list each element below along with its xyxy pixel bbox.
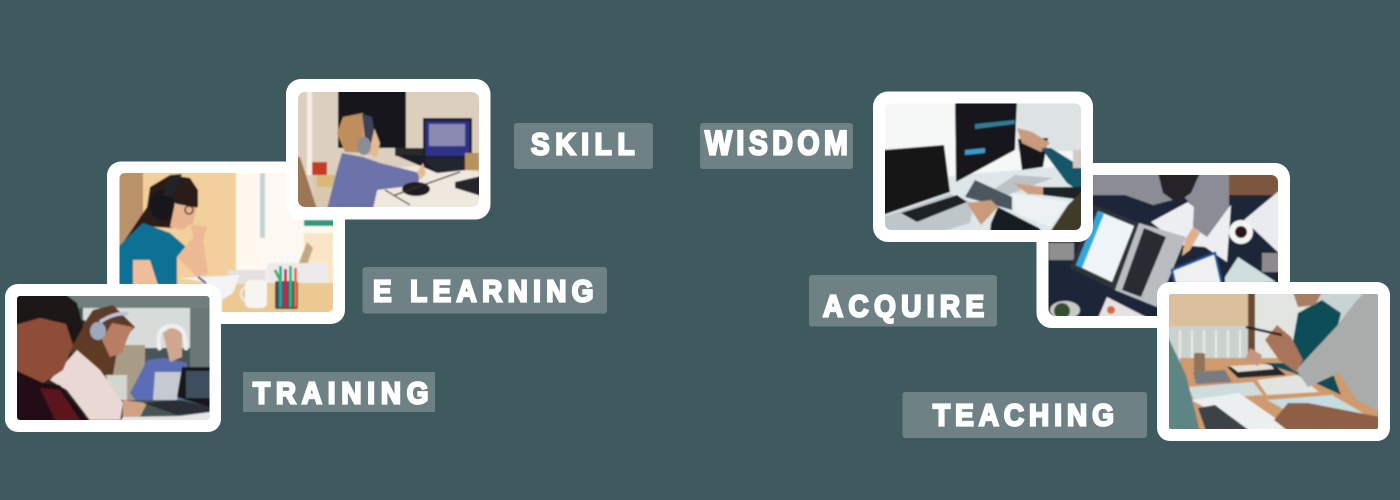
- photo card: e learning: [107, 162, 345, 324]
- label: e learning: E LEARNING: [373, 274, 594, 309]
- photo card: skill: [286, 79, 490, 220]
- label: wisdom: WISDOM: [705, 124, 848, 162]
- label: skill: [514, 123, 653, 169]
- label: acquire: [809, 275, 997, 326]
- photo card: training: [5, 284, 221, 432]
- label: training: TRAINING: [253, 376, 429, 411]
- photo card: acquire: [1036, 163, 1290, 328]
- photo card: wisdom: [873, 92, 1093, 242]
- photo card: teaching: [1157, 282, 1390, 441]
- label: teaching: TEACHING: [933, 398, 1114, 433]
- label: e learning: [362, 267, 607, 314]
- label: skill: SKILL: [531, 127, 635, 162]
- label: acquire: ACQUIRE: [823, 289, 984, 324]
- label: teaching: [902, 392, 1147, 438]
